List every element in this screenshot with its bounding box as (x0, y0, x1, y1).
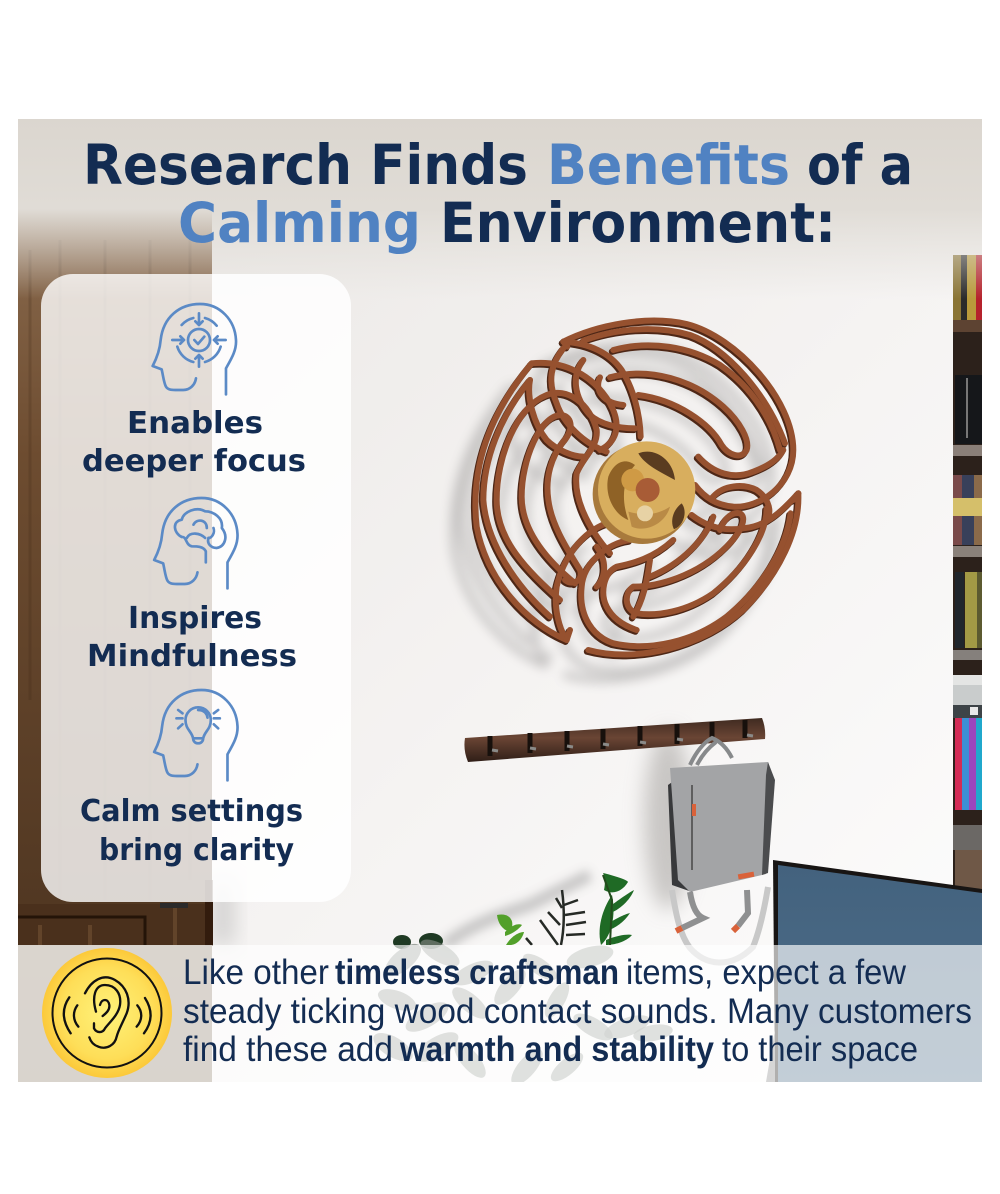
bookshelf (953, 255, 982, 890)
monitor stand (766, 1030, 775, 1082)
wall sculpture (474, 321, 798, 656)
title: Calming (178, 191, 421, 255)
fern (526, 890, 586, 945)
text: inspires mindfulness: Mindfulness (87, 639, 297, 674)
wooden door (18, 119, 213, 1082)
text: enables deeper focus: deeper focus (82, 444, 306, 479)
icon: head with light bulb (154, 690, 238, 780)
infographic canvas (18, 119, 982, 1082)
title: Benefits (547, 133, 790, 197)
panel: benefits (41, 274, 351, 902)
text: bottom note: find these add (183, 1030, 393, 1069)
monitor (773, 860, 982, 1082)
text: bottom note (183, 953, 972, 1069)
text: inspires mindfulness: Inspires (128, 601, 262, 636)
sculpture hub (593, 441, 695, 544)
wall shadow beside door (213, 902, 241, 945)
text: bottom note: Like other (183, 953, 329, 992)
icon: ear badge (42, 948, 172, 1078)
text: calm settings bring clarity (80, 794, 303, 868)
top beige fade (18, 119, 982, 299)
backpack (668, 738, 775, 963)
sculpture rings (475, 321, 798, 655)
text: calm settings bring clarity: Calm settings (80, 794, 303, 829)
text: bottom note: timeless craftsman (335, 953, 619, 992)
wall (212, 240, 953, 945)
title (83, 133, 913, 255)
coat rack (464, 718, 765, 762)
text: bottom note: to their space (722, 1030, 918, 1069)
plant wall shadow (445, 875, 590, 945)
bottom band door tint (18, 945, 212, 1082)
faded leaves under band (369, 934, 674, 1090)
text: bottom note: warmth and stability (399, 1030, 714, 1069)
text: bottom note: steady ticking wood contact sounds. Many customers (183, 992, 972, 1031)
bottom band (18, 945, 982, 1082)
photo background (18, 119, 982, 1090)
title: Research Finds (83, 133, 528, 197)
plant (369, 873, 674, 1090)
icon: head with brain (154, 498, 238, 588)
icon: head with focus target (153, 304, 236, 394)
text: enables deeper focus: Enables (127, 406, 263, 441)
title: Environment: (440, 191, 836, 255)
sculpture dark edge (474, 322, 797, 656)
text: enables deeper focus (82, 406, 306, 479)
panel: wall side brightening (212, 274, 351, 902)
title: of a (807, 133, 913, 197)
sculpture cast shadow (453, 346, 776, 680)
text: inspires mindfulness (87, 601, 297, 674)
text: bottom note: items, expect a few (626, 953, 907, 992)
text: calm settings bring clarity: bring clarity (99, 833, 294, 868)
bag shadow (644, 730, 692, 910)
